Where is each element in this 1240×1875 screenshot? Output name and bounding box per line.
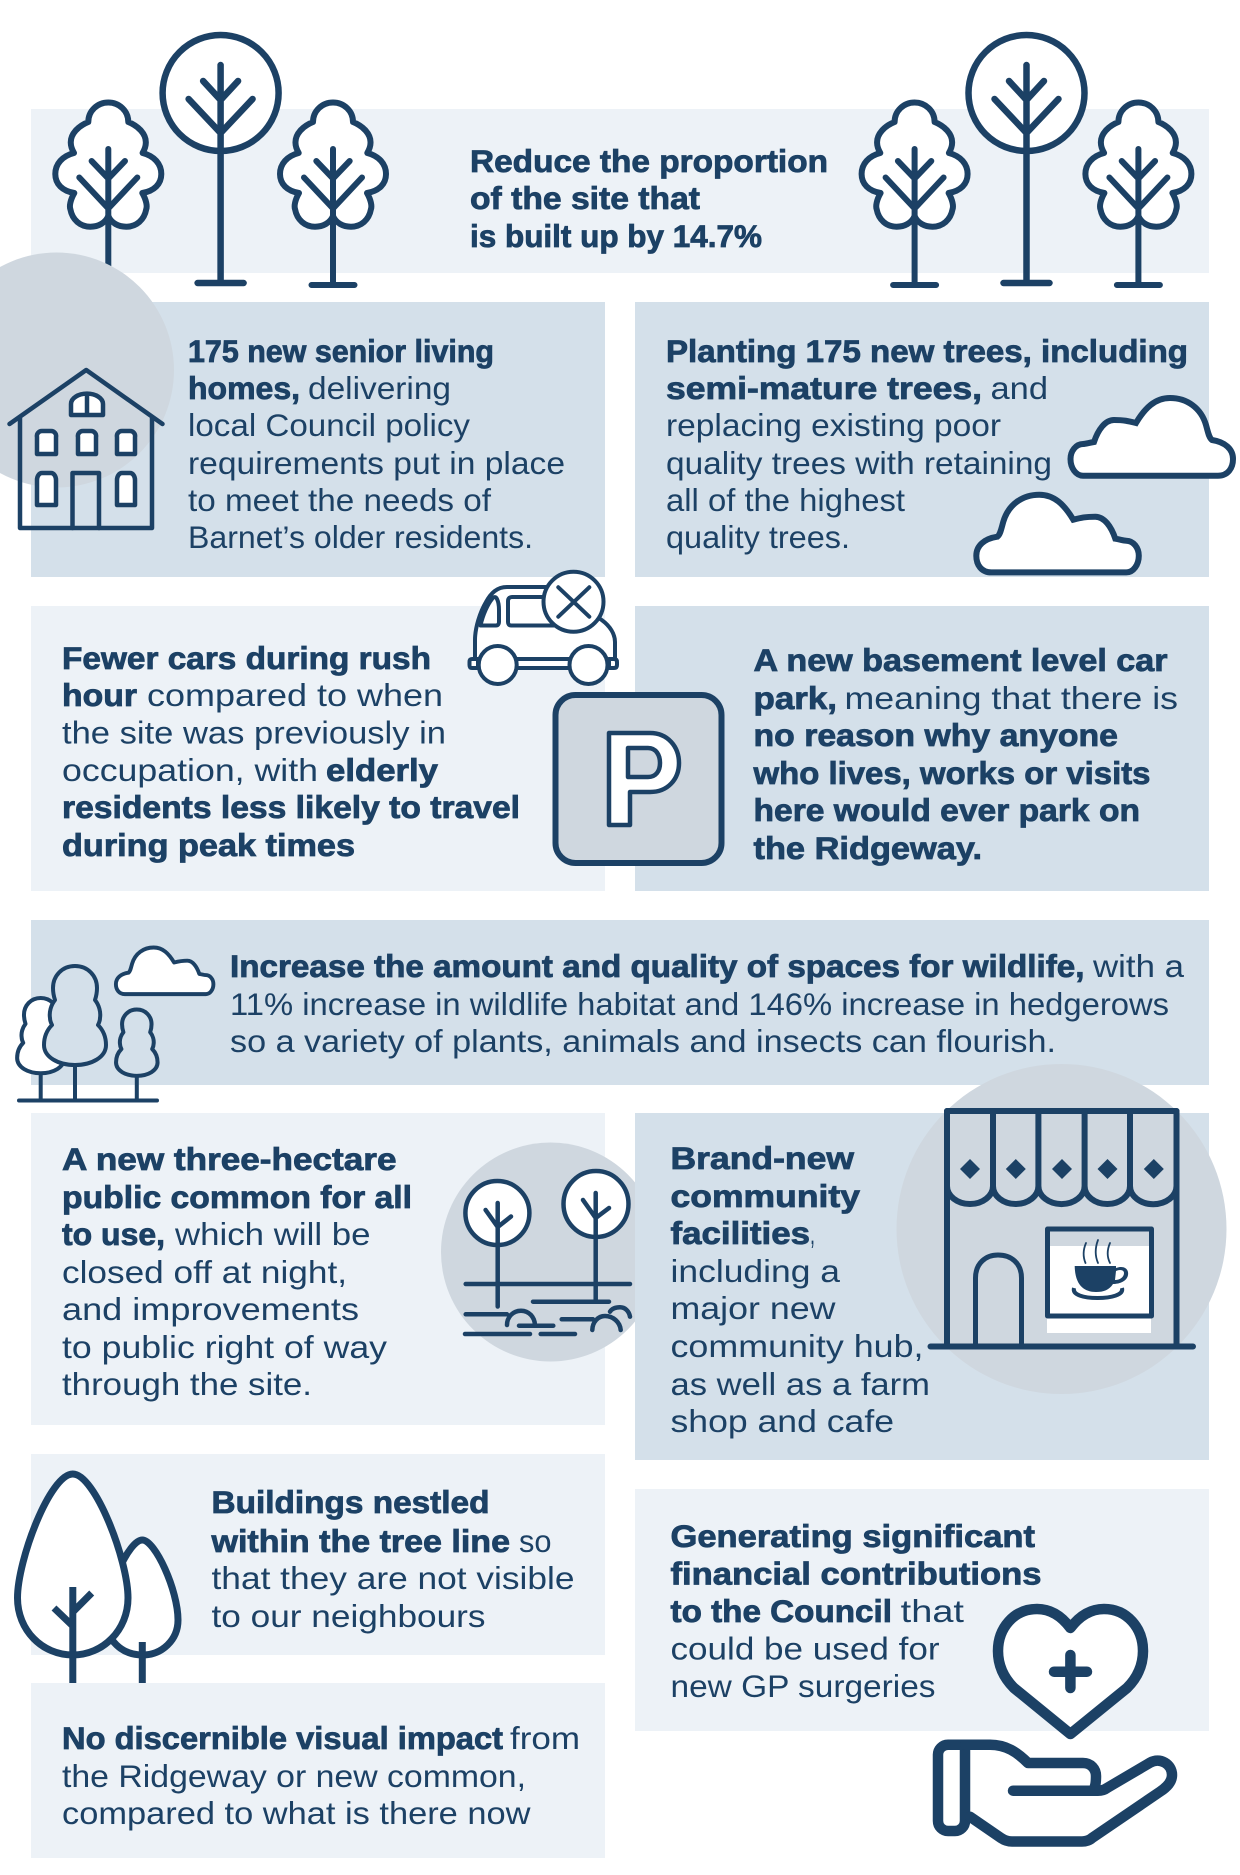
text: planting new trees: quality trees with retaining — [666, 445, 1052, 481]
text: basement car park: no reason why anyone — [754, 717, 1118, 753]
text: community facilities: major new — [670, 1290, 836, 1326]
panel: public common — [31, 1113, 605, 1425]
text: planting new trees — [666, 333, 1188, 555]
panel: financial contributions — [635, 1489, 1209, 1731]
text: community facilities: community — [670, 1178, 861, 1214]
text: fewer cars at rush hour: compared to when — [147, 677, 443, 713]
text: fewer cars at rush hour: residents less likely to travel — [62, 789, 520, 825]
heading: reduce built-up proportion: is built up by 14.7% — [470, 218, 762, 254]
text: basement car park: here would ever park on — [754, 792, 1140, 828]
text: public common — [62, 1141, 412, 1402]
icon: wildlife trees and cloud — [17, 948, 213, 1100]
text: no visual impact: the Ridgeway or new common, — [62, 1758, 526, 1794]
text: senior living homes: requirements put in place — [188, 445, 565, 481]
text: senior living homes: delivering — [308, 370, 451, 406]
icon: parking sign — [556, 695, 722, 863]
text: financial contributions: new GP surgeries — [670, 1668, 936, 1704]
heading: reduce built-up proportion — [470, 143, 828, 254]
panel: community facilities — [635, 1113, 1209, 1460]
icon: upper cloud — [1070, 398, 1233, 476]
text: financial contributions: that — [901, 1593, 964, 1629]
text: planting new trees: replacing existing poor — [666, 407, 1001, 443]
text: no visual impact: from — [510, 1720, 580, 1756]
text: community facilities: including a — [670, 1253, 841, 1289]
text: no visual impact — [62, 1720, 580, 1831]
text: fewer cars at rush hour: during peak times — [62, 827, 355, 863]
text: fewer cars at rush hour: Fewer cars during rush — [62, 640, 431, 676]
text: buildings within tree line: so — [519, 1523, 552, 1559]
text: planting new trees: semi-mature trees, — [666, 370, 982, 406]
text: basement car park: the Ridgeway. — [754, 830, 982, 866]
text: no visual impact: No discernible visual impact — [62, 1720, 504, 1756]
icon: two tall trees — [18, 1474, 178, 1683]
text: planting new trees: Planting 175 new trees, including — [666, 333, 1188, 369]
text: spaces for wildlife: so a variety of plants, animals and insects can flourish. — [230, 1023, 1056, 1059]
text: spaces for wildlife — [230, 948, 1185, 1059]
text: fewer cars at rush hour: occupation, with — [62, 752, 318, 788]
text: public common: public common for all — [62, 1179, 412, 1215]
text: senior living homes: local Council policy — [188, 407, 470, 443]
text: public common: which will be — [174, 1216, 370, 1252]
text: basement car park — [752, 642, 1178, 866]
icon: grey circle and house — [0, 252, 174, 528]
text: spaces for wildlife: with a — [1092, 948, 1185, 984]
text: fewer cars at rush hour — [62, 640, 520, 863]
icon: left group of trees — [55, 35, 386, 285]
panel: fewer cars at rush hour — [31, 606, 605, 891]
text: buildings within tree line: within the tree line — [210, 1523, 510, 1559]
text: community facilities: community hub, — [670, 1328, 924, 1364]
text: planting new trees: all of the highest — [666, 482, 905, 518]
text: spaces for wildlife: 11% increase in wildlife habitat and 146% increase in hedgerows — [230, 986, 1169, 1022]
heading: reduce built-up proportion: Reduce the proportion — [470, 143, 828, 179]
text: financial contributions: financial contributions — [670, 1556, 1042, 1592]
text: financial contributions: could be used for — [670, 1630, 940, 1666]
text: senior living homes: homes, — [188, 370, 300, 406]
text: public common: closed off at night, — [62, 1254, 347, 1290]
text: financial contributions — [670, 1518, 1042, 1704]
icon: cafe shopfront in circle — [896, 1064, 1226, 1394]
text: no visual impact: compared to what is there now — [62, 1795, 531, 1831]
panel: spaces for wildlife — [31, 920, 1209, 1085]
panel: buildings within tree line — [31, 1454, 605, 1655]
text: fewer cars at rush hour: hour — [62, 677, 137, 713]
panel: senior living homes — [31, 302, 605, 577]
text: community facilities — [670, 1140, 930, 1439]
text: buildings within tree line: to our neighbours — [212, 1598, 486, 1634]
panel: basement car park — [635, 606, 1209, 891]
heading: reduce built-up proportion: of the site that — [470, 180, 701, 216]
panel: reduce built-up proportion — [31, 109, 1209, 273]
text: buildings within tree line — [210, 1484, 574, 1634]
panel: planting new trees — [635, 302, 1209, 577]
text: public common: and improvements — [62, 1291, 359, 1327]
text: basement car park: who lives, works or visits — [752, 755, 1150, 791]
text: spaces for wildlife: Increase the amount and quality of spaces for wildlife, — [230, 948, 1084, 984]
text: senior living homes: 175 new senior living — [188, 333, 494, 369]
panel: no visual impact — [31, 1683, 605, 1858]
text: fewer cars at rush hour: elderly — [326, 752, 439, 788]
text: public common: through the site. — [62, 1366, 312, 1402]
text: community facilities: Brand-new — [670, 1140, 855, 1176]
icon: heart held in hand — [938, 1609, 1172, 1842]
icon: right group of trees — [862, 35, 1191, 285]
text: financial contributions: Generating significant — [670, 1518, 1036, 1554]
icon: awning diamonds — [960, 1159, 1164, 1179]
icon: crossed-out car — [470, 572, 617, 684]
text: community facilities: shop and cafe — [670, 1403, 894, 1439]
text: buildings within tree line: that they are not visible — [212, 1560, 574, 1596]
text: senior living homes: to meet the needs of — [188, 482, 491, 518]
text: community facilities: as well as a farm — [670, 1366, 930, 1402]
icon: lower cloud — [976, 495, 1139, 572]
text: public common: A new three-hectare — [62, 1141, 396, 1177]
text: basement car park: A new basement level car — [754, 642, 1168, 678]
icon: common landscape in circle — [441, 1142, 660, 1362]
text: senior living homes — [188, 333, 565, 555]
text: buildings within tree line: Buildings nestled — [212, 1484, 490, 1520]
text: planting new trees: and — [990, 370, 1048, 406]
text: community facilities: , — [810, 1215, 815, 1251]
text: fewer cars at rush hour: the site was previously in — [62, 714, 446, 750]
text: planting new trees: quality trees. — [666, 519, 850, 555]
text: public common: to use, — [62, 1216, 165, 1252]
text: senior living homes: Barnet’s older residents. — [188, 519, 533, 555]
text: basement car park: park, — [754, 680, 837, 716]
text: public common: to public right of way — [62, 1329, 387, 1365]
text: basement car park: meaning that there is — [844, 680, 1178, 716]
text: financial contributions: to the Council — [670, 1593, 892, 1629]
text: community facilities: facilities — [670, 1215, 810, 1251]
icon: cafe window with coffee cup — [1047, 1229, 1152, 1333]
